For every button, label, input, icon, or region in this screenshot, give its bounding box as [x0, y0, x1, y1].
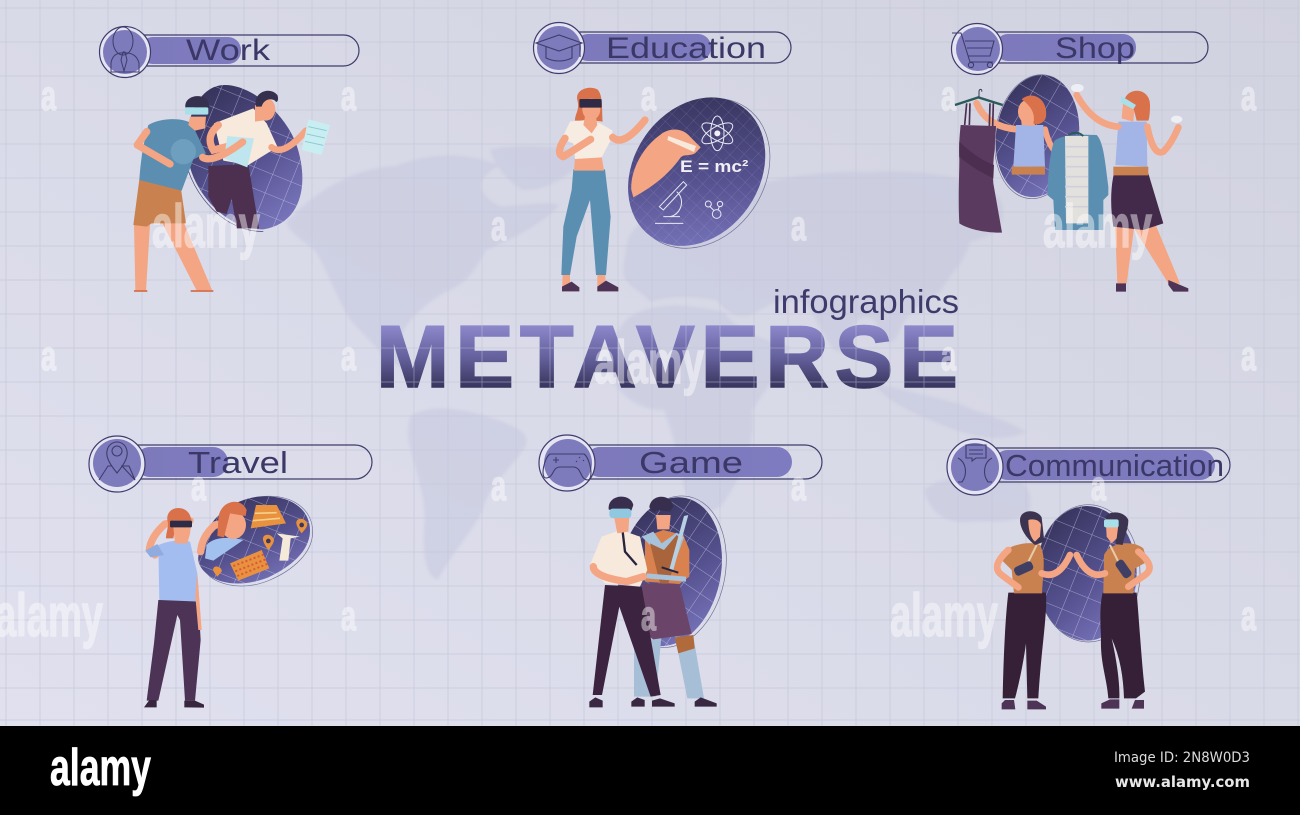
watermarks: a [641, 592, 656, 639]
work header [100, 26, 359, 78]
watermarks: a [791, 202, 806, 249]
panel: work [100, 26, 359, 291]
watermarks: alamy [1043, 193, 1152, 260]
shop illustration [955, 69, 1188, 292]
panel: shop [952, 24, 1208, 292]
communication header [947, 439, 1230, 495]
game header [539, 435, 822, 491]
watermarks [0, 72, 1256, 649]
watermarks: a [791, 462, 806, 509]
panel: communication [947, 439, 1230, 709]
watermarks: a [941, 72, 956, 119]
watermarks: a [1241, 332, 1256, 379]
watermarks: a [191, 462, 206, 509]
watermarks: a [41, 332, 56, 379]
footer bar [0, 726, 1300, 815]
watermarks: a [491, 462, 506, 509]
education header: Education [606, 32, 766, 65]
title: infographics: infographics [773, 283, 959, 320]
watermarks: a [641, 72, 656, 119]
formula: E = mc² [680, 157, 749, 176]
watermarks: a [341, 592, 356, 639]
game header: Game [639, 445, 743, 480]
watermarks: a [941, 332, 956, 379]
work header: Work [186, 34, 271, 67]
watermarks: a [341, 332, 356, 379]
image id: Image ID: 2N8W0D3 [1114, 750, 1250, 766]
education header [534, 22, 791, 74]
education illustration [560, 71, 798, 291]
watermarks: a [1241, 592, 1256, 639]
communication illustration [997, 505, 1150, 709]
watermarks: alamy [152, 193, 260, 260]
panel: game [539, 435, 822, 707]
travel header [89, 436, 372, 492]
watermarks: a [1091, 462, 1106, 509]
watermarks: a [41, 72, 56, 119]
travel illustration [144, 496, 313, 708]
watermarks: a [341, 72, 356, 119]
footer logo: alamy [50, 739, 151, 797]
panel: education [534, 22, 798, 291]
world map [286, 146, 1031, 580]
watermarks: alamy [890, 582, 998, 649]
communication header: Communication [1005, 448, 1224, 483]
panel: travel [89, 436, 372, 708]
game illustration [589, 486, 740, 707]
shop header: Shop [1055, 32, 1135, 65]
watermarks: a [1241, 72, 1256, 119]
work illustration [133, 85, 330, 291]
watermarks: alamy [594, 329, 704, 396]
title: METAVERSE: METAVERSE [376, 307, 958, 406]
watermarks: alamy [0, 582, 103, 649]
travel header: Travel [188, 445, 288, 480]
site url: www.alamy.com [1115, 773, 1250, 791]
watermarks: a [491, 202, 506, 249]
shop header [952, 24, 1208, 74]
